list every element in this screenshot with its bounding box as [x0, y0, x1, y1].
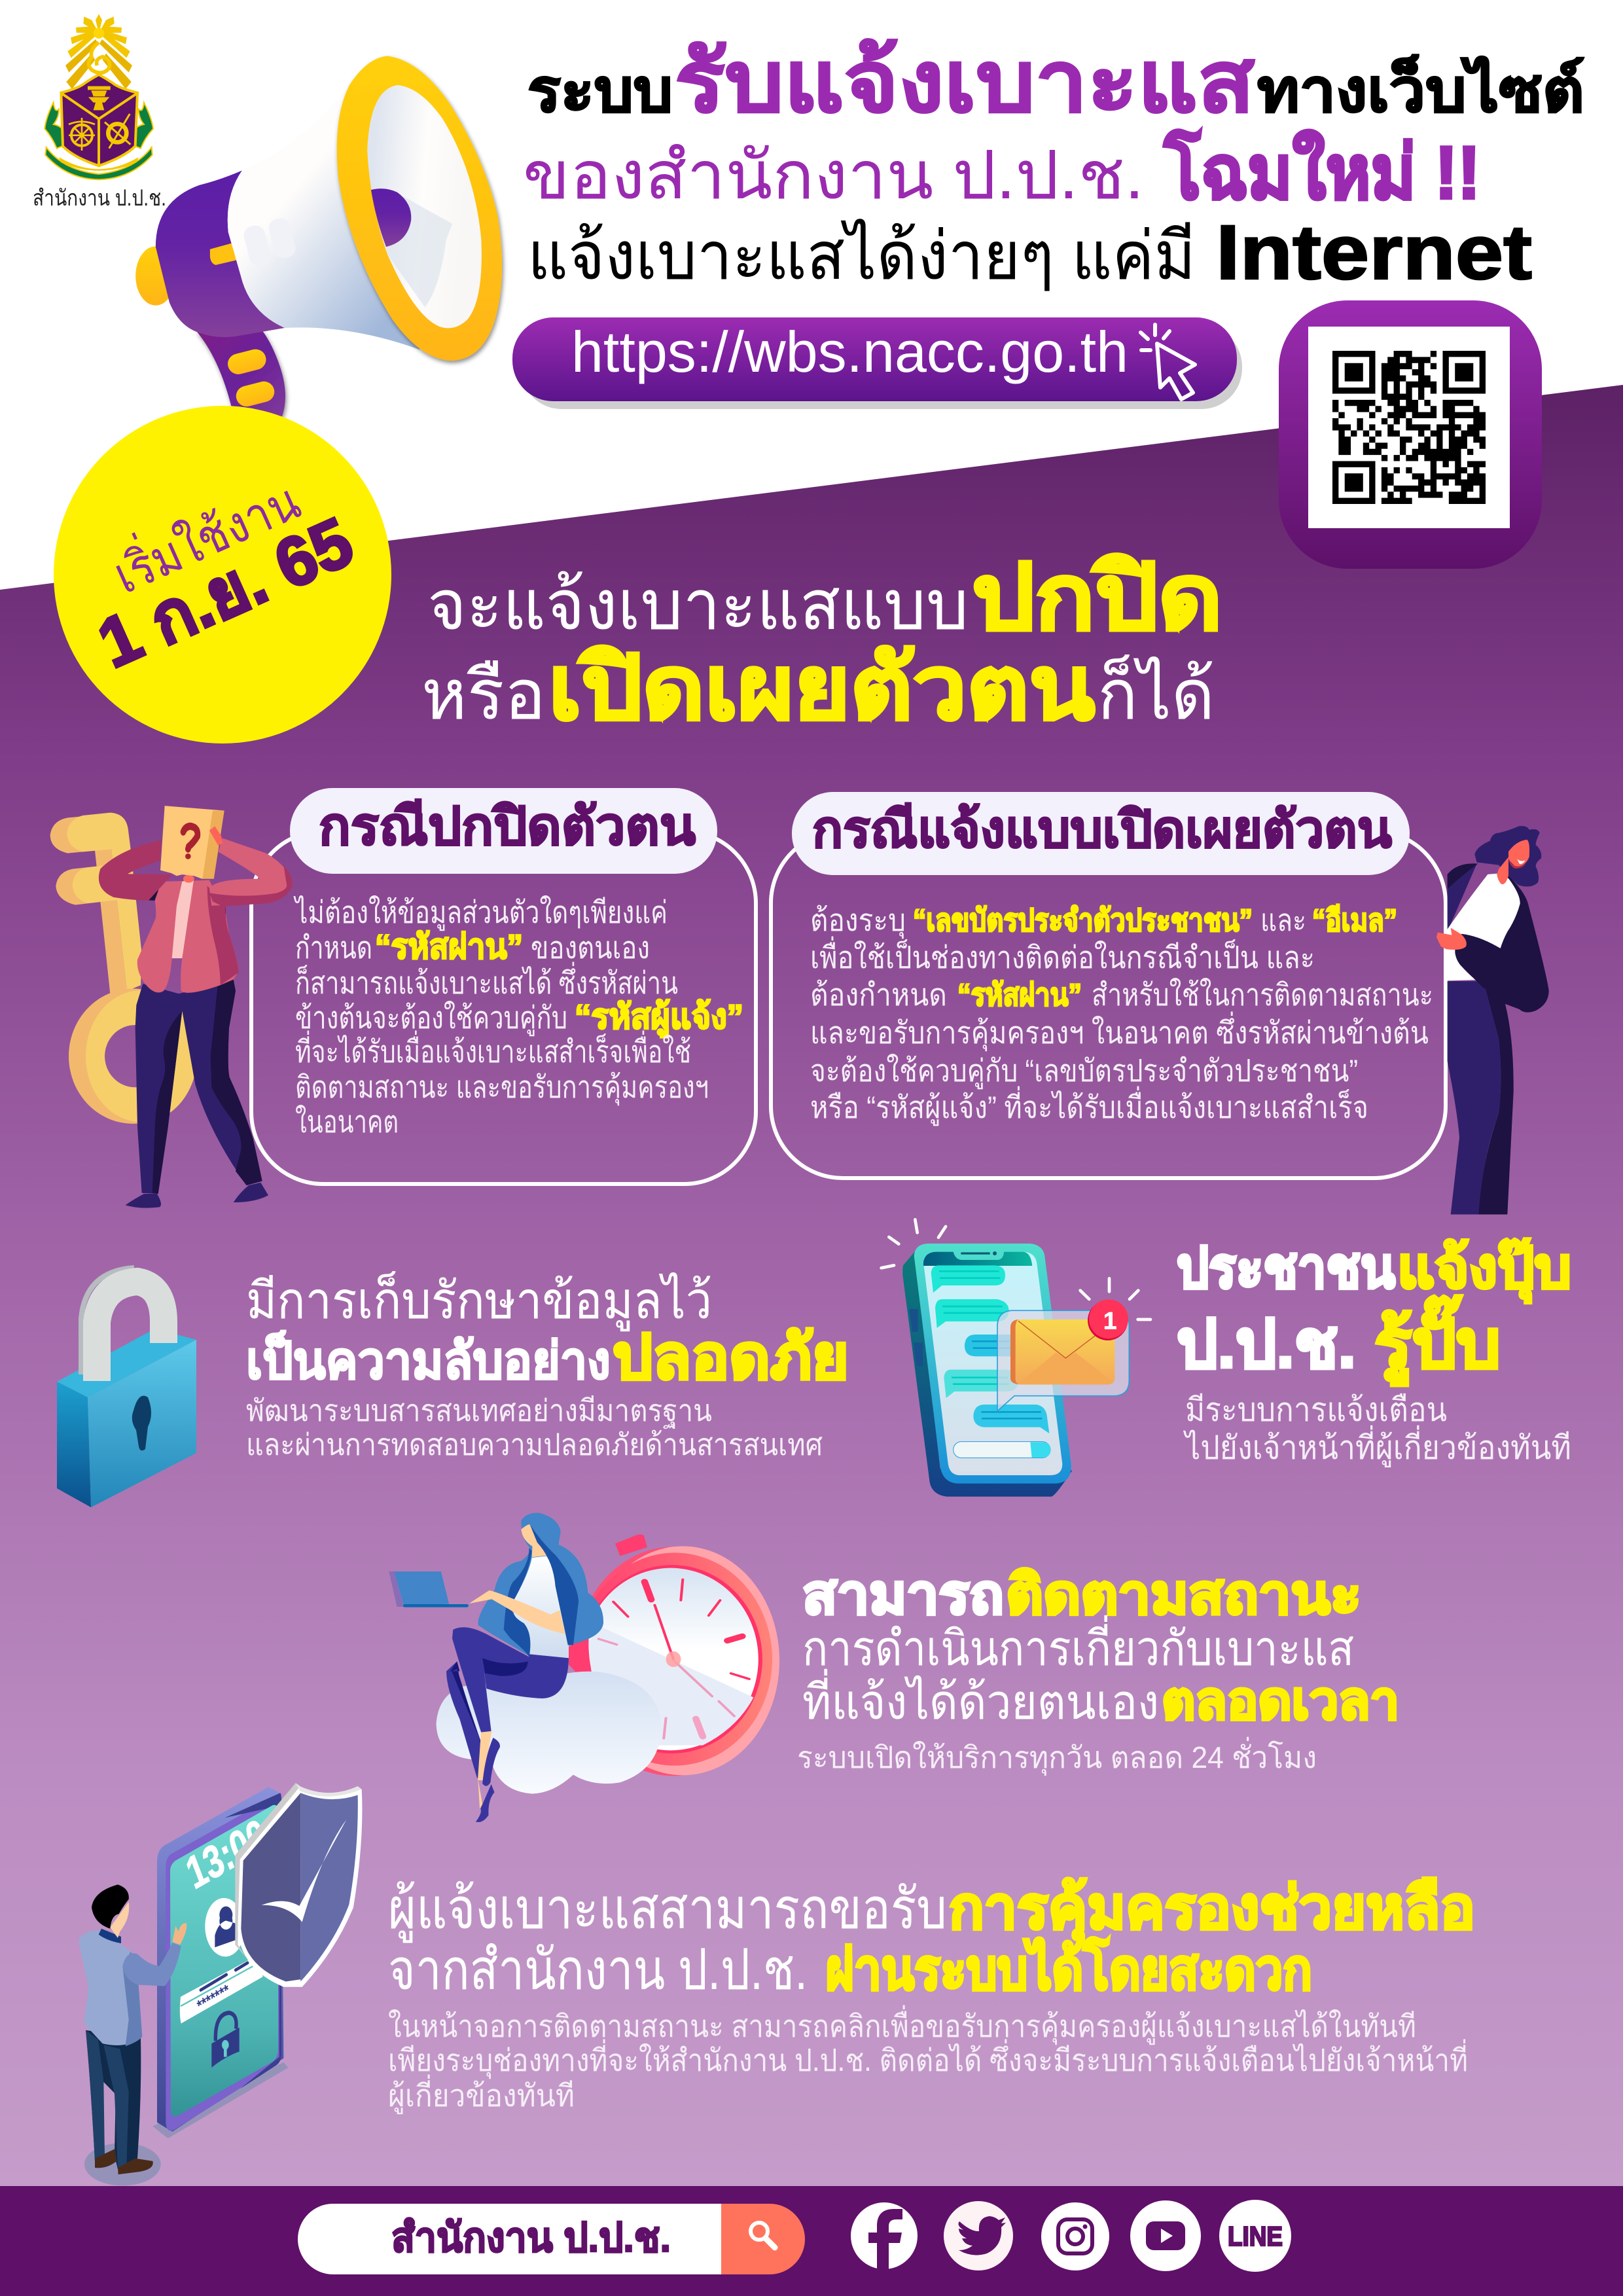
text block: ต้องระบุ	[810, 903, 906, 939]
title: ทางเว็บไซต์	[1257, 54, 1584, 124]
illustration: woman on cloud with clock	[389, 1513, 779, 1822]
footer band	[0, 2186, 1623, 2296]
block: secure data: และผ่านการทดสอบความปลอดภัยด้านสารสนเทศ	[246, 1427, 823, 1462]
heading pill	[792, 792, 1410, 875]
main heading: หรือ	[421, 656, 546, 734]
block: protection request: ผ่านระบบได้โดยสะดวก	[826, 1937, 1312, 2001]
icon: youtube	[1130, 2200, 1201, 2271]
icon: instagram	[1041, 2202, 1109, 2270]
illustration: man with tablet and shield: *******	[194, 1981, 232, 2015]
block: secure data: เป็นความลับอย่าง	[246, 1331, 611, 1390]
search box	[298, 2204, 805, 2274]
text block: กำหนด	[295, 930, 372, 965]
text block: ไม่ต้องให้ข้อมูลส่วนตัวใดๆเพียงแค่	[293, 895, 668, 931]
title: Internet	[1216, 209, 1532, 296]
main heading	[421, 546, 1222, 738]
text block	[293, 895, 743, 1139]
title: แจ้งเบาะแสได้ง่ายๆ แค่มี	[527, 219, 1196, 293]
text block: ของตนเอง	[531, 930, 650, 965]
block: instant notification: รู้ปั๊บ	[1374, 1295, 1501, 1386]
text block: ข้างต้นจะต้องใช้ควบคู่กับ	[295, 1000, 567, 1037]
block: protection request: การคุ้มครองช่วยหลือ	[949, 1876, 1475, 1945]
badge: start date circle: 1 ก.ย. 65	[87, 503, 364, 683]
block: instant notification: แจ้งปุ๊บ	[1397, 1237, 1571, 1303]
title	[523, 34, 1584, 296]
purple diagonal background	[0, 385, 1623, 2186]
block: track status: ติดตามสถานะ	[1006, 1564, 1361, 1625]
block: track status: ที่แจ้งได้ด้วยตนเอง	[802, 1668, 1159, 1729]
text block: ในอนาคต	[295, 1104, 399, 1139]
text block: “รหัสผ่าน”	[375, 928, 523, 966]
title: ของสำนักงาน ป.ป.ช.	[523, 138, 1144, 213]
block: track status: สามารถ	[802, 1564, 1004, 1625]
block: secure data: พัฒนาระบบสารสนเทศอย่างมีมาตรฐาน	[246, 1393, 712, 1429]
heading pill	[290, 788, 717, 874]
block: protection request: ผู้เกี่ยวข้องทันที	[388, 2074, 575, 2115]
block: protection request	[388, 1876, 1475, 2115]
block: instant notification: ประชาชน	[1177, 1237, 1395, 1300]
block: track status: ระบบเปิดให้บริการทุกวัน ตลอด 24 ชั่วโมง	[797, 1736, 1317, 1776]
icon: megaphone	[135, 56, 502, 416]
block: instant notification: ไปยังเจ้าหน้าที่ผู้เกี่ยวข้องทันที	[1183, 1426, 1571, 1467]
text block: สำหรับใช้ในการติดตามสถานะ	[1092, 977, 1433, 1012]
icon: cursor click	[1141, 325, 1195, 399]
QR code panel	[1279, 300, 1542, 569]
text block: จะต้องใช้ควบคู่กับ “เลขบัตรประจำตัวประชาชน”	[810, 1053, 1358, 1090]
badge: start date circle	[54, 406, 391, 744]
main heading: เปิดเผยตัวตน	[548, 638, 1095, 738]
text block: “เลขบัตรประจำตัวประชาชน”	[913, 903, 1253, 937]
block: protection request: ในหน้าจอการติดตามสถานะ สามารถคลิกเพื่อขอรับการคุ้มครองผู้แจ้งเบาะแสได้ในทันที	[388, 2005, 1416, 2045]
icon: phone with notification	[882, 1219, 1150, 1497]
block: track status: การดำเนินการเกี่ยวกับเบาะแส	[802, 1615, 1354, 1676]
search box: สำนักงาน ป.ป.ช.	[391, 2215, 671, 2261]
main heading: ปกปิด	[972, 546, 1222, 649]
illustration: man with tablet and shield: 13:00	[180, 1809, 274, 1899]
block: protection request: เพียงระบุช่องทางที่จะให้สำนักงาน ป.ป.ช. ติดต่อได้ ซึ่งจะมีระบบการแจ้งเตือนไปยังเจ้าหน้าที่	[388, 2039, 1468, 2079]
block: secure data	[246, 1271, 849, 1462]
text block: หรือ “รหัสผู้แจ้ง” ที่จะได้รับเมื่อแจ้งเบาะแสสำเร็จ	[810, 1086, 1368, 1126]
title: โฉมใหม่ !!	[1164, 129, 1480, 215]
text block	[810, 903, 1433, 1126]
illustration: anonymous person with key	[50, 806, 293, 1208]
block: instant notification	[1177, 1237, 1571, 1467]
illustration: man with tablet and shield	[79, 1783, 362, 2185]
url pill: https://wbs.nacc.go.th	[571, 319, 1128, 384]
icon: LINE: LINE	[1228, 2221, 1283, 2251]
text block: และ	[1260, 903, 1306, 937]
icon: LINE	[1219, 2200, 1291, 2272]
heading pill: กรณีแจ้งแบบเปิดเผยตัวตน	[812, 800, 1392, 858]
text block: ติดตามสถานะ และขอรับการคุ้มครองฯ	[295, 1069, 709, 1106]
text block: ต้องกำหนด	[810, 977, 947, 1012]
url pill	[512, 317, 1242, 409]
text block: ก็สามารถแจ้งเบาะแสได้ ซึ่งรหัสผ่าน	[295, 961, 678, 1000]
icon: search	[751, 2223, 775, 2248]
panel: identified case	[771, 792, 1446, 1178]
block: secure data: ปลอดภัย	[613, 1323, 849, 1391]
text block: เพื่อใช้เป็นช่องทางติดต่อในกรณีจำเป็น และ	[810, 936, 1315, 975]
panel: anonymous case	[251, 788, 756, 1184]
icon: twitter	[944, 2201, 1013, 2270]
icon: facebook	[851, 2202, 918, 2269]
badge: start date circle: เริ่มใช้งาน	[103, 467, 308, 605]
text block: “รหัสผู้แจ้ง”	[575, 998, 743, 1038]
logo caption: สำนักงาน ป.ป.ช.	[33, 186, 166, 211]
block: protection request: จากสำนักงาน ป.ป.ช.	[388, 1939, 808, 2001]
heading pill: กรณีปกปิดตัวตน	[319, 797, 696, 855]
icon: phone with notification: 1	[1103, 1308, 1116, 1335]
block: instant notification: มีระบบการแจ้งเตือน	[1185, 1391, 1447, 1428]
title: รับแจ้งเบาะแส	[675, 34, 1255, 130]
block: track status	[797, 1564, 1399, 1776]
title: ระบบ	[527, 58, 673, 124]
text block: “อีเมล”	[1312, 903, 1397, 937]
text block: และขอรับการคุ้มครองฯ ในอนาคต ซึ่งรหัสผ่านข้างต้น	[810, 1011, 1429, 1052]
illustration: person beside identified panel	[1436, 826, 1549, 1215]
text block: ที่จะได้รับเมื่อแจ้งเบาะแสสำเร็จเพื่อใช้	[295, 1030, 691, 1069]
main heading: จะแจ้งเบาะแสแบบ	[427, 567, 969, 644]
block: track status: ตลอดเวลา	[1162, 1672, 1399, 1730]
icon: padlock	[57, 1268, 196, 1507]
block: secure data: มีการเก็บรักษาข้อมูลไว้	[246, 1271, 712, 1331]
QR code	[1332, 351, 1486, 504]
logo: NACC emblem	[33, 14, 166, 211]
main heading: ก็ได้	[1097, 654, 1215, 734]
block: instant notification: ป.ป.ช.	[1177, 1307, 1356, 1382]
text block: “รหัสผ่าน”	[957, 977, 1082, 1012]
block: protection request: ผู้แจ้งเบาะแสสามารถขอรับ	[388, 1878, 947, 1943]
